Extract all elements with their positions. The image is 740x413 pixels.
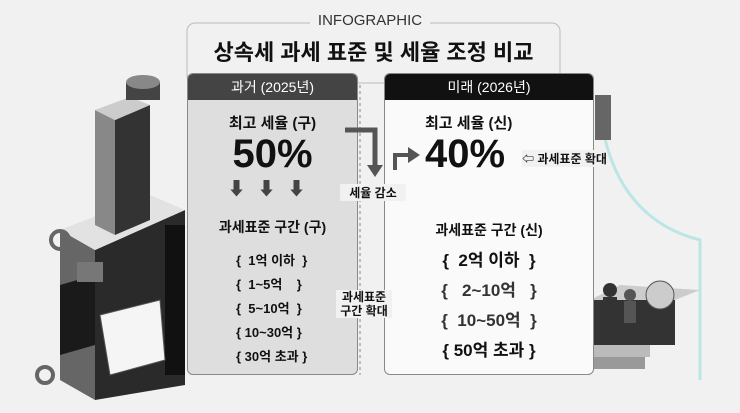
past header: 과거 (2025년) [231, 79, 314, 95]
past brackets: 과세표준 구간 (구) [219, 219, 326, 235]
panel: past: ⬇⬇⬇ [228, 179, 318, 199]
panel: past: { 5~10억 } [236, 301, 302, 316]
arrow: rate decrease [345, 128, 420, 177]
callout: bracket expansion: 과세표준 [342, 290, 386, 304]
future header: 미래 (2026년) [448, 79, 530, 95]
panel: future: 40% [425, 132, 505, 176]
callout: bracket expansion: 구간 확대 [340, 304, 388, 318]
panel: past: { 1억 이하 } [236, 253, 307, 268]
past rate: 최고 세율 (구) [229, 115, 316, 132]
future rate: 최고 세율 (신) [425, 115, 512, 132]
future header [385, 74, 593, 100]
panel: past [187, 73, 358, 375]
panel: past: { 1~5억 } [236, 277, 302, 292]
panel: future: { 2~10억 } [441, 281, 537, 300]
panel: future: { 10~50억 } [441, 311, 537, 330]
callout: rate decrease: 세율 감소 [349, 186, 397, 200]
future brackets: 과세표준 구간 (신) [435, 222, 543, 238]
past header [188, 74, 357, 100]
callout: bracket expansion right: ⇦ 과세표준 확대 [522, 152, 607, 166]
left machine [37, 75, 185, 400]
title: 상속세 과세 표준 및 세율 조정 비교 [213, 40, 534, 65]
callout: rate decrease [340, 184, 406, 201]
panel: past: { 10~30억 } [236, 325, 302, 340]
panel: future [384, 73, 594, 375]
callout: bracket expansion [336, 290, 392, 318]
panel: future: { 50억 초과 } [442, 341, 536, 360]
header label: INFOGRAPHIC [318, 12, 422, 29]
panel: future: { 2억 이하 } [442, 251, 536, 270]
panel: past: 50% [232, 132, 313, 176]
panel: past: { 30억 초과 } [236, 349, 307, 364]
right decor [575, 95, 700, 380]
